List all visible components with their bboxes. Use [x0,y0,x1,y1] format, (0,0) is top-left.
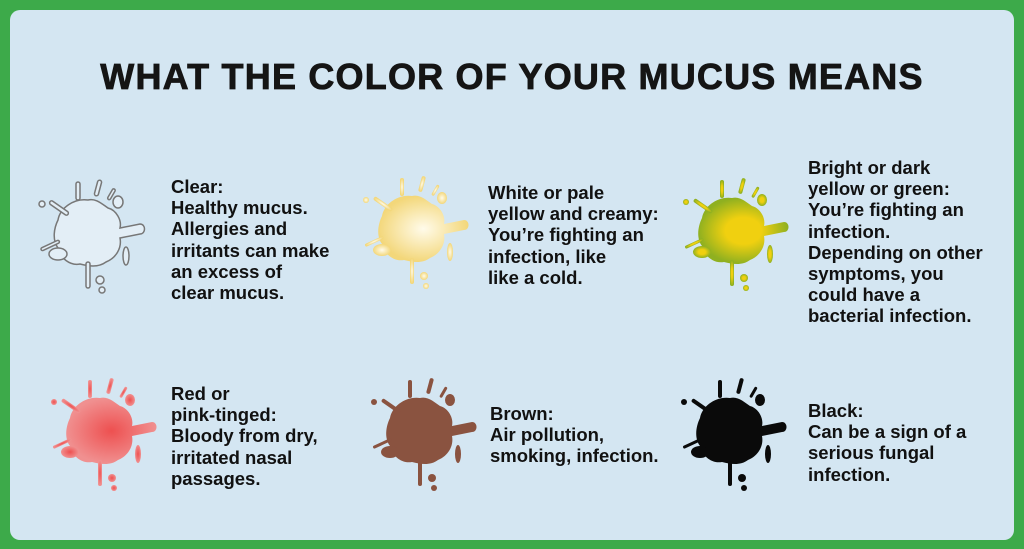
icon: red splat [51,378,156,491]
text: black: Black: [808,400,864,421]
text: yellow: You’re fighting an [808,199,964,220]
text: yellow: yellow or green: [808,178,950,199]
text: black [808,400,966,485]
text: yellow: symptoms, you [808,263,944,284]
icon: black splat [681,378,786,491]
text: yellow: could have a [808,284,920,305]
text: yellow: bacterial infection. [808,305,971,326]
text: yellow: Bright or dark [808,157,930,178]
text: clear [171,176,329,303]
text: white: You’re fighting an [488,224,644,245]
text: clear: Clear: [171,176,223,197]
text: yellow: Depending on other [808,242,983,263]
text: red: Bloody from dry, [171,425,318,446]
icon: brown splat [371,378,476,491]
text: clear: Healthy mucus. [171,197,308,218]
text: clear: irritants can make [171,240,329,261]
text: white: infection, like [488,246,606,267]
text: red: passages. [171,468,260,489]
text: red: Red or [171,383,230,404]
icon: white splat [363,176,468,289]
text: black: serious fungal [808,442,934,463]
text: clear: Allergies and [171,218,287,239]
text: black: Can be a sign of a [808,421,966,442]
title: WHAT THE COLOR OF YOUR MUCUS MEANS [100,56,924,97]
text: red: irritated nasal [171,447,292,468]
text: yellow: infection. [808,221,890,242]
text: brown [490,403,659,466]
text: red [171,383,318,489]
text: brown: Air pollution, [490,424,604,445]
text: brown: smoking, infection. [490,445,659,466]
icon: clear splat [38,180,146,294]
text: white: like a cold. [488,267,583,288]
text: white [488,182,659,288]
text: brown: Brown: [490,403,554,424]
text: red: pink-tinged: [171,404,277,425]
text: white: yellow and creamy: [488,203,659,224]
text: clear: clear mucus. [171,282,284,303]
text: yellow [808,157,983,326]
text: clear: an excess of [171,261,282,282]
text: black: infection. [808,464,890,485]
text: white: White or pale [488,182,604,203]
icon: yellow splat [683,178,788,291]
